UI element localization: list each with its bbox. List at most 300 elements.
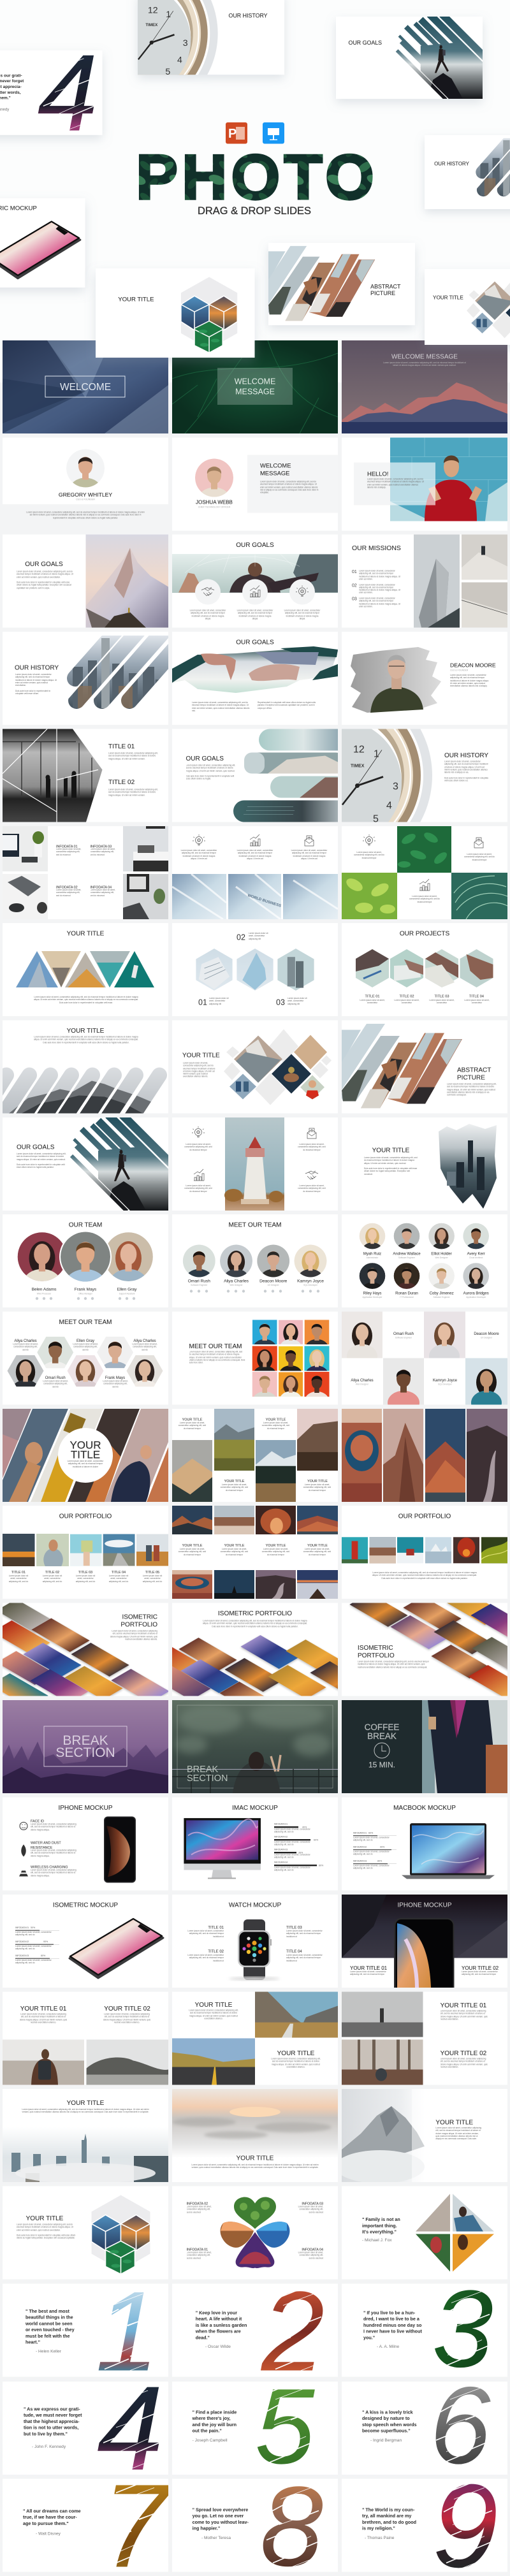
- quote: " A kiss is a lovely trick: [362, 2410, 413, 2415]
- photo: clock arcs: 4: [386, 801, 392, 811]
- slide: abstract picture: [342, 1020, 507, 1113]
- photo: striped leaves: [451, 873, 507, 919]
- heading: MACBOOK MOCKUP: [393, 1805, 456, 1812]
- slide: our history city: [3, 632, 168, 725]
- text block: Lorem ipsum dolor sit amet, consectetur adipiscing elit, sed do eiusmod tempor incididunt ut labore et dolore magna aliqua. Ut enim ad minim veniam, quis nostrud exercitation.: [17, 2223, 73, 2231]
- left features: Lorem ipsum dolor sit amet, consectetur adipiscing elit, sed do eiusmod tempor incididunt ut: [187, 1930, 224, 1938]
- member top names: Lorem ipsum dolor sit amet, consectetur adipiscing elit, sed do: [132, 1343, 157, 1351]
- author: - Helen Keller: [36, 2350, 62, 2354]
- photo: hiker stripes: [66, 1117, 168, 1211]
- hero background: [0, 0, 510, 382]
- captions: TITLE 05: [145, 1571, 159, 1575]
- quote: heart.": [26, 2340, 40, 2345]
- subtitle: DRAG & DROP SLIDES: [198, 205, 311, 217]
- slide: break section woman: [172, 1700, 338, 1793]
- names: Omari Rush: [393, 1332, 414, 1336]
- text block: Lorem ipsum dolor sit amet, consectetur adipiscing elit, sed do eiusmod tempor incididunt ut labore et dolore magna aliqua. Ut enim ad minim veniam, quis nostrud exercitation ullamco laboris nisi ut aliquip ex ea commodo consequat. Duis aute irure dolor in reprehenderit in voluptate.: [191, 2164, 319, 2169]
- quote: hundred minus one day so: [363, 2322, 422, 2328]
- quote: " The best and most: [26, 2308, 69, 2314]
- text 2: Lorem ipsum dolor sit amet, consectetur adipiscing elit, sed do eiusmod tempor: [462, 1970, 498, 1976]
- member bottom names: [42, 1376, 129, 1388]
- text block: Lorem ipsum dolor sit amet, consectetur adipiscing elit, sed do eiusmod tempor incididunt ut labore et dolore magna aliqua. Ut enim ad minim veniam, quis nostrud exercitation ullamco laboris nisi ut aliquip ex ea.: [444, 760, 488, 774]
- text block: Lorem ipsum dolor sit amet, consectetur adipiscing elit, sed do eiusmod tempor incididunt ut labore et dolore magna aliqua. Ut enim ad minim veniam, quis nostrud exercitation ullamco laboris nisi ut aliquip ex ea commodo consequat. Duis aute irure dolor in reprehenderit in voluptate velit esse.: [34, 996, 138, 1004]
- info 04: Lorem ipsum dolor sit amet, consectetur adipiscing elit, sed do eiusmod: [91, 889, 115, 897]
- hexagon 1: [196, 949, 233, 991]
- text block: Duis aute irure dolor in reprehenderit in voluptate velit esse cillum.: [15, 690, 50, 695]
- photo: desk: [3, 826, 48, 871]
- heading: BREAK: [62, 1733, 108, 1748]
- quote: " All our dreams can come: [23, 2508, 81, 2514]
- member 2: Frank Mays: [75, 1288, 97, 1292]
- text block 1: Lorem ipsum dolor sit amet, consectetur adipiscing elit, sed do eiusmod tempor: [354, 851, 384, 859]
- heading: OUR PROJECTS: [400, 931, 449, 937]
- diamond photo: office: [234, 1035, 282, 1082]
- slide: iphone mockup dark: [342, 1895, 507, 1995]
- photo 3: [383, 1358, 424, 1405]
- names row 2: Ronan Duran: [395, 1292, 418, 1295]
- slide: quote 4: [3, 2361, 168, 2495]
- slide: our portfolio five: [3, 1506, 168, 1599]
- slide: infodata clover: [172, 2187, 338, 2280]
- project 3: Lorem ipsum dolor sit amet, consectetur: [429, 999, 455, 1004]
- left features: TITLE 01: [208, 1926, 224, 1930]
- photo 1: [342, 1312, 382, 1358]
- text 1: [350, 1965, 390, 1979]
- text block: Lorem ipsum dolor sit amet, consectetur adipiscing elit, sed do eiusmod tempor incididunt ut labore et dolore magna aliqua. Ut enim ad minim veniam quis nostrud.: [383, 361, 466, 367]
- slide: quote 9: [342, 2461, 507, 2576]
- bars: INFODATA 02: [274, 1836, 288, 1838]
- slide: coffee break: [342, 1700, 507, 1793]
- slide: icons newspaper: [172, 826, 338, 919]
- author: - Oscar Wilde: [205, 2345, 231, 2349]
- heading: HELLO!: [367, 470, 388, 477]
- portrait 2: [59, 1230, 112, 1300]
- name: GREGORY WHITLEY: [59, 491, 112, 498]
- feature 2: RESISTANCE: [31, 1846, 52, 1850]
- text block 2: Lorem ipsum dolor sit amet, consectetur adipiscing elit, sed do eiusmod tempor incididunt ut labore et dolore magna aliqua. Ut enim ad: [237, 849, 273, 860]
- slide: lighthouse: [172, 1117, 338, 1211]
- names: Aliya Charles: [224, 1279, 249, 1284]
- icon: bulb: [192, 1126, 205, 1137]
- quote: beautiful things in the: [26, 2315, 73, 2320]
- names row 1: Andrew Wallace: [393, 1252, 421, 1256]
- photo: flatlay: [3, 874, 48, 919]
- bars: INFODATA 04: [274, 1861, 288, 1864]
- slide: meet our team circles: [172, 1214, 338, 1307]
- portrait on brush: [351, 647, 441, 713]
- right features: Lorem ipsum dolor sit amet, consectetur adipiscing elit, sed do eiusmod tempor incididunt ut: [286, 1930, 323, 1938]
- quote: you.": [363, 2334, 375, 2340]
- info 01: Lorem ipsum dolor sit amet, consectetur adipiscing elit, sed do eiusmod: [186, 2252, 212, 2259]
- text block 2: Lorem ipsum dolor sit amet, consectetur adipiscing elit, sed do eiusmod tempor incididunt ut labore et dolore magna aliqua. Ut enim ad minim veniam.: [108, 788, 158, 796]
- slide: Hello: [342, 437, 507, 530]
- bars: 80%: [41, 1954, 46, 1957]
- member top names: Aliya Charles: [14, 1339, 37, 1343]
- project 1: TITLE 01: [365, 994, 380, 998]
- text block: Lorem ipsum dolor sit amet, consectetur adipiscing elit, sed do eiusmod tempor incididunt ut labore et dolore magna aliqua. Ut enim ad minim veniam, quis nostrud exercitation ullamco laboris nisi ut aliquip ex ea commodo consequat. Duis aute.: [435, 2127, 481, 2140]
- info 01: INFODATA 01: [56, 845, 78, 849]
- heading: YOUR TITLE: [67, 1028, 105, 1035]
- slide: welcome message mountain: [342, 340, 507, 433]
- names: SQL Developer: [438, 1383, 453, 1386]
- info 01: Lorem ipsum dolor sit amet, consectetur adipiscing elit, sed do eiusmod: [56, 848, 81, 856]
- photo: newspaper: [172, 874, 338, 919]
- photos: [342, 1537, 507, 1564]
- number 01: Lorem ipsum dolor sit amet, consectetur adipiscing elit: [209, 997, 228, 1005]
- bars: [15, 1926, 59, 1965]
- feature 2: [21, 1841, 76, 1859]
- quote: is my religion.": [362, 2526, 395, 2531]
- author: - Michael J. Fox: [362, 2238, 392, 2243]
- text block: Lorem ipsum dolor sit amet, consectetur adipiscing elit, sed do eiusmod tempor incididunt ut labore et dolore magna aliqua. Ut enim ad minim veniam, quis nostrud exercitation ullamco laboris nisi ut aliquip ex ea commodo consequat. Duis aute irure dolor in reprehenderit in voluptate velit esse cillum dolore eu fugiat nulla pariatur.: [26, 511, 145, 519]
- info 02: [186, 2202, 212, 2217]
- heading: OUR GOALS: [236, 639, 274, 646]
- text block: Duis aute irure dolor in reprehenderit in voluptate velit esse cillum dolore eu fugiat nulla pariatur. Excepteur sint occaecat cupidatat non proident, sunt in culpa.: [17, 581, 71, 589]
- photo: forest: [342, 2040, 423, 2085]
- project 2: TITLE 02: [399, 994, 414, 998]
- quote: when the flowers are: [195, 2329, 241, 2334]
- hexagon portraits: [7, 1334, 163, 1403]
- number 01: 01: [198, 998, 207, 1007]
- text block 3: Lorem ipsum dolor sit amet, consectetur adipiscing elit, sed do eiusmod tempor: [409, 895, 440, 903]
- names row 1: Software Engineer: [398, 1256, 416, 1259]
- info 03: INFODATA 03: [302, 2202, 323, 2206]
- quote: and the joy will burn: [193, 2422, 237, 2427]
- slide: our goals mountain: [3, 534, 168, 627]
- diamond photo: woman: [300, 1075, 324, 1099]
- info 03: Lorem ipsum dolor sit amet, consectetur adipiscing elit, sed do eiusmod: [91, 848, 115, 856]
- portrait: [66, 449, 105, 487]
- hero card: quote four: [0, 33, 103, 154]
- captions: Lorem ipsum dolor sit amet, consectetur adipiscing elit, sed do: [109, 1575, 128, 1583]
- feature 1: FACE ID: [31, 1819, 44, 1823]
- hero card: abstract picture: [268, 243, 415, 325]
- bars: INFODATA 02: [353, 1846, 367, 1849]
- info 02: INFODATA 02: [56, 886, 78, 890]
- hero card: your title diamonds: [425, 269, 510, 345]
- project 2: Lorem ipsum dolor sit amet, consectetur: [394, 999, 419, 1004]
- right features: Lorem ipsum dolor sit amet, consectetur adipiscing elit, sed do eiusmod tempor incididunt ut: [286, 1954, 323, 1962]
- heading: BREAK: [187, 1765, 218, 1775]
- heading: ISOMETRIC MOCKUP: [53, 1902, 118, 1909]
- names: UX Designer: [481, 1336, 493, 1339]
- slide: watch mockup: [172, 1895, 338, 1988]
- text 2: [271, 2050, 321, 2074]
- slide: four canyon photos: [342, 1409, 507, 1502]
- bars: INFODATA 01: [15, 1926, 29, 1929]
- text block: [17, 571, 73, 589]
- number 02: Lorem ipsum dolor sit amet, consectetur adipiscing elit: [249, 932, 268, 940]
- slide: our missions: [342, 534, 507, 627]
- photo strips: [3, 1409, 168, 1502]
- bars: INFODATA 03: [274, 1849, 288, 1851]
- heading: WELCOME: [235, 377, 275, 386]
- quote: world cannot be seen: [25, 2320, 73, 2326]
- portrait 3: [104, 1232, 153, 1300]
- text 3: YOUR TITLE: [266, 1418, 286, 1422]
- text 1: [177, 1418, 207, 1433]
- bars: 50%: [31, 1926, 36, 1929]
- slide: our history clock: [238, 678, 507, 872]
- heading: YOUR TITLE: [67, 2100, 105, 2107]
- text block 1: Lorem ipsum dolor sit amet, consectetur adipiscing elit, sed do eiusmod tempor incididunt ut labore et dolore magna aliqua. Ut enim ad minim veniam, quis nostrud exercitation ullamco laboris nisi.: [192, 701, 249, 712]
- triangle photos: [16, 951, 154, 987]
- slide: your title collage: [3, 1409, 168, 1502]
- bars: INFODATA 01: [353, 1832, 367, 1835]
- info 03: [298, 2202, 323, 2217]
- heading: OUR HISTORY: [15, 664, 59, 672]
- text 3: [261, 1418, 291, 1433]
- heading: COFFEE: [365, 1722, 399, 1732]
- heading: YOUR TITLE: [372, 1147, 410, 1154]
- text block: Lorem ipsum dolor sit amet, consectetur adipiscing elit, sed do eiusmod tempor incididunt ut labore et dolore magna aliqua. Ut enim ad minim veniam, quis nostrud exercitation ullamco laboris nisi ut aliquip ex ea commodo consequat. Duis aute irure dolor in reprehenderit in voluptate velit esse cillum dolore eu fugiat nulla pariatur.: [34, 1035, 138, 1044]
- captions: Lorem ipsum dolor sit amet, consectetur adipiscing elit, sed do eiusmod tempor: [178, 1548, 206, 1556]
- photo: clock arcs: TIMEX: [351, 764, 365, 769]
- text 1: Lorem ipsum dolor sit amet, consectetur adipiscing elit, sed do eiusmod tempor: [178, 1422, 206, 1430]
- gray diamonds: [224, 1029, 332, 1105]
- text block 2: Lorem ipsum dolor sit amet, consectetur adipiscing elit, sed do eiusmod tempor: [184, 1184, 212, 1193]
- heading: BREAK: [367, 1731, 397, 1741]
- social icons: [190, 1290, 319, 1293]
- slide: your title two photos: [3, 1991, 168, 2085]
- name: DEACON MOORE: [450, 662, 496, 668]
- text block: Duis aute irure dolor in reprehenderit in voluptate velit esse cillum dolore eu fugiat.: [186, 775, 234, 780]
- heading: WELCOME: [260, 462, 291, 469]
- quote: " Find a place inside: [193, 2410, 237, 2415]
- slide: title 01 02: [3, 729, 168, 822]
- text block: Lorem ipsum dolor sit amet, consectetur adipiscing elit, sed do eiusmod tempor incididunt ut labore et dolore magna aliqua. Ut enim ad minim veniam, quis nostrud exercitation ullamco laboris nisi ut aliquip ex ea commodo consequat. Duis aute irure dolor in reprehenderit in voluptate velit esse cillum dolore eu fugiat nulla pariatur.: [203, 1619, 307, 1627]
- slide: triangles: [3, 923, 168, 1016]
- icon: PowerPoint: P: [228, 127, 237, 141]
- captions: Lorem ipsum dolor sit amet, consectetur adipiscing elit, sed do: [76, 1575, 95, 1583]
- bars: [353, 1832, 397, 1870]
- slide: your title road: [172, 1991, 338, 2085]
- author: - Thomas Paine: [365, 2536, 395, 2540]
- text block 1: Lorem ipsum dolor sit amet, consectetur adipiscing elit, sed do eiusmod tempor incididunt ut labore et dolore magna aliqua: [190, 609, 226, 620]
- member 1: Belen Adams: [32, 1288, 57, 1292]
- heading: ISOMETRIC: [358, 1645, 393, 1652]
- slide: quote 2: [172, 2268, 338, 2394]
- captions: YOUR TITLE: [266, 1544, 286, 1548]
- bars: INFODATA 03: [353, 1860, 367, 1863]
- slide: iphone mockup: [3, 1798, 168, 1891]
- names: Omari Rush: [188, 1279, 210, 1284]
- info 04: [298, 2248, 323, 2263]
- quote: that the highest apprecia-: [24, 2419, 80, 2424]
- info 03: Lorem ipsum dolor sit amet, consectetur adipiscing elit, sed do eiusmod: [298, 2206, 323, 2213]
- dark band: [342, 1895, 507, 1958]
- member top names: Lorem ipsum dolor sit amet, consectetur adipiscing elit, sed do: [13, 1343, 38, 1351]
- quote: must be felt with the: [26, 2333, 69, 2339]
- member top names: [12, 1339, 158, 1351]
- text 1: [189, 2002, 238, 2026]
- photo: workspace: [123, 874, 168, 919]
- slide: quote 1: [3, 2268, 168, 2394]
- quote: or even touched - they: [26, 2327, 75, 2332]
- slide: your title clouds: [172, 2089, 338, 2182]
- photo: stairs: [462, 534, 507, 580]
- isometric phone: [69, 1919, 163, 1978]
- photo: mountain: [85, 534, 168, 627]
- member 2: [75, 1288, 97, 1295]
- text 2: YOUR TITLE: [277, 2050, 315, 2057]
- text 2: YOUR TITLE 02: [441, 2050, 487, 2057]
- author: - Ingrid Bergman: [370, 2438, 402, 2443]
- names row 2: [362, 1292, 489, 1299]
- bars: Lorem ipsum dolor sit amet, consectetur adipiscing elit, sed do: [353, 1836, 390, 1842]
- portrait 4: [295, 1244, 326, 1290]
- icon: Keynote: [263, 122, 284, 144]
- diamond photo: people: [229, 1073, 256, 1099]
- photo: window silhouette: [3, 729, 102, 822]
- feature 2: WATER AND DUST: [31, 1841, 61, 1845]
- hexagon 2: [237, 949, 273, 991]
- info 02: Lorem ipsum dolor sit amet, consectetur adipiscing elit, sed do eiusmod: [186, 2206, 212, 2213]
- text 2: Lorem ipsum dolor sit amet, consectetur adipiscing elit, sed do eiusmod tempor incididunt ut labore et dolore magna aliqua. Ut enim ad minim veniam, quis nostrud exercitation ullamco.: [103, 2013, 150, 2023]
- photo: road: [172, 2039, 255, 2085]
- names row 2: Riley Hays: [363, 1292, 381, 1295]
- info 02: [56, 886, 83, 900]
- slide: our goals brush: [172, 632, 339, 725]
- heading: PORTFOLIO: [120, 1621, 157, 1628]
- bars: 90%: [43, 1940, 48, 1943]
- bars: [274, 1823, 324, 1872]
- quote: heart. A life without it: [196, 2316, 242, 2322]
- text block 2: Lorem ipsum dolor sit amet, consectetur adipiscing elit, sed do eiusmod tempor: [464, 853, 495, 861]
- text 4: YOUR TITLE: [307, 1480, 328, 1483]
- text 1: Lorem ipsum dolor sit amet, consectetur adipiscing elit, sed do eiusmod tempor incididunt ut labore et dolore magna aliqua. Ut enim ad minim veniam, quis nostrud exercitation ullamco.: [20, 2013, 67, 2023]
- hero card: our goals hiker: [336, 17, 483, 99]
- photo: clock arcs: 5: [373, 813, 379, 825]
- text block 1: Lorem ipsum dolor sit amet, consectetur adipiscing elit, sed do eiusmod tempor incididunt ut labore et dolore magna aliqua. Ut enim ad: [181, 849, 217, 860]
- text block: Duis aute irure dolor in reprehenderit in voluptate velit esse cillum dolore eu fugiat nulla pariatur. Excepteur sint occaecat cupidatat.: [17, 2234, 75, 2239]
- info 01: [186, 2248, 212, 2263]
- slide: isometric portfolio 1: [0, 1599, 170, 1707]
- quote: become superfluous.": [362, 2428, 411, 2434]
- heading: MESSAGE: [235, 388, 275, 397]
- photo 1: [342, 1409, 382, 1502]
- names row 2: Application Developer: [466, 1296, 486, 1299]
- text block: Duis aute irure dolor in reprehenderit in voluptate velit esse cillum dolore eu fugiat nulla pariatur.: [17, 1163, 65, 1168]
- right features: TITLE 04: [286, 1950, 302, 1954]
- heading: PORTFOLIO: [358, 1652, 395, 1659]
- heading: YOUR TITLE: [237, 2155, 274, 2162]
- diamond photo: hands: [272, 1054, 311, 1094]
- text 4: [302, 1480, 332, 1495]
- isometric tiles: [0, 1599, 170, 1707]
- quote: " Keep love in your: [196, 2310, 237, 2315]
- heading: WELCOME: [60, 382, 111, 393]
- info 02: Lorem ipsum dolor sit amet, consectetur adipiscing elit, sed do eiusmod: [56, 889, 81, 897]
- slide: quote 3: [342, 2268, 507, 2390]
- bars: INFODATA 01: [274, 1823, 288, 1826]
- text 2: [462, 1965, 501, 1979]
- slide: your title city fog: [3, 2089, 168, 2183]
- names: Software Engineer: [395, 1336, 412, 1339]
- portrait 1: [183, 1244, 215, 1290]
- photo 4: [465, 1358, 507, 1405]
- portrait 2: [220, 1244, 252, 1290]
- number 6: 6: [430, 2364, 491, 2487]
- text block: Lorem ipsum dolor sit amet, consectetur adipiscing elit, sed do eiusmod tempor incididunt ut labore et dolore magna aliqua. Ut enim ad minim veniam, quis nostrud.: [17, 1153, 66, 1161]
- right features: [286, 1926, 323, 1964]
- bars: Lorem ipsum dolor sit amet, consectetur adipiscing elit, sed do: [15, 1931, 52, 1936]
- text block: Lorem ipsum dolor sit amet, consectetur adipiscing elit, sed do eiusmod tempor incididunt ut labore et dolore magna aliqua. Ut enim ad minim veniam, quis nostrud exercitation ullamco laboris nisi ut aliquip ex ea commodo consequat. Duis aute irure dolor.: [189, 1350, 245, 1364]
- names: Deacon Moore: [474, 1332, 499, 1336]
- quote: ing happier.": [193, 2526, 220, 2531]
- text 4: Lorem ipsum dolor sit amet, consectetur adipiscing elit, sed do eiusmod tempor: [303, 1483, 331, 1492]
- author: - Mother Teresa: [201, 2536, 231, 2540]
- text block: Lorem ipsum dolor sit amet, consectetur adipiscing elit, sed do eiusmod tempor incididunt ut labore et dolore magna aliqua. Ut enim ad minim veniam, quis nostrud exercitation ullamco laboris.: [183, 1062, 215, 1078]
- heading 2: TITLE 02: [108, 779, 135, 786]
- quote: " If you live to be a hun-: [363, 2310, 415, 2315]
- photo: newspaper: WORLD BUSINESS: [247, 894, 282, 908]
- slide: welcome message green: [172, 340, 338, 433]
- heading: YOUR TITLE: [67, 931, 105, 937]
- text block: Lorem ipsum dolor sit amet, consectetur adipiscing elit, sed do eiusmod tempor incididunt ut labore et dolore magna aliqua. Ut enim ad minim veniam, quis nostrud exercitation.: [17, 570, 73, 578]
- photo: city fog: [3, 2127, 168, 2183]
- captions: YOUR TITLE: [307, 1544, 328, 1548]
- quote: age to pursue them.": [23, 2521, 69, 2526]
- captions: TITLE 02: [45, 1571, 59, 1575]
- photo: valley: [255, 1991, 338, 2037]
- member top names: Aliya Charles: [133, 1339, 156, 1343]
- number 4: 4: [97, 2361, 164, 2495]
- bars: Lorem ipsum dolor sit amet, consectetur adipiscing elit, sed do: [15, 1959, 52, 1964]
- bars: Lorem ipsum dolor sit amet, consectetur adipiscing elit, sed do: [353, 1850, 390, 1856]
- names row 2: Coby Jimenez: [430, 1292, 454, 1295]
- photo: clock arcs: 3: [393, 782, 398, 792]
- heading: OUR GOALS: [236, 542, 274, 549]
- text 1: YOUR TITLE: [195, 2002, 233, 2009]
- photo 2: [383, 1409, 423, 1502]
- text block 2: Reprehenderit in voluptate velit esse cillum dolore eu fugiat nulla pariatur. Excepteur sint occaecat cupidatat non proident, sunt in culpa qui officia.: [258, 701, 316, 709]
- social icons: [36, 1297, 135, 1300]
- role: CEO & FOUNDER: [76, 498, 95, 501]
- heading: MEET OUR TEAM: [189, 1343, 242, 1350]
- text block: Lorem ipsum dolor sit amet, consectetur adipiscing elit, sed do eiusmod tempor incididunt ut labore et dolore magna aliqua. Ut enim ad minim veniam, quis nostrud exercitation.: [15, 673, 57, 687]
- text block: [364, 1156, 418, 1188]
- bars: Lorem ipsum dolor sit amet, consectetur adipiscing elit, sed do: [15, 1945, 52, 1950]
- feature 3: Lorem ipsum dolor sit amet, consectetur adipiscing elit, sed do eiusmod tempor incididunt ut labore et dolore magna aliqua.: [31, 1869, 76, 1877]
- list: 02: [352, 584, 357, 588]
- frame: [44, 1726, 127, 1766]
- slide: quote 7: [3, 2461, 172, 2576]
- feature 2: Lorem ipsum dolor sit amet, consectetur adipiscing elit, sed do eiusmod tempor incididunt ut labore et dolore magna aliqua.: [31, 1849, 76, 1857]
- icon: bulb: [363, 834, 375, 845]
- slide: our goals hiker: [3, 1117, 168, 1211]
- text block: Lorem ipsum dolor sit amet, consectetur adipiscing elit, sed do eiusmod tempor incididunt ut labore et dolore: [68, 1460, 103, 1468]
- text 1: [19, 2005, 68, 2030]
- names row 1: Elliot Holder: [431, 1252, 452, 1256]
- text 1: Lorem ipsum dolor sit amet, consectetur adipiscing elit, sed do eiusmod tempor incididunt ut labore et dolore magna aliqua. Ut enim ad minim veniam, quis nostrud exercitation.: [441, 2009, 488, 2020]
- info 04: Lorem ipsum dolor sit amet, consectetur adipiscing elit, sed do eiusmod: [298, 2252, 323, 2259]
- photo 1: [172, 1440, 212, 1502]
- photo: diagonal city: [60, 632, 168, 711]
- photo 2: [424, 1312, 465, 1358]
- heading: OUR HISTORY: [444, 752, 488, 759]
- hexagon 3: [277, 949, 314, 991]
- photo: clock arcs: 12: [353, 745, 365, 755]
- icon: PowerPoint: [226, 122, 247, 144]
- heading: OUR GOALS: [17, 1144, 55, 1151]
- heading: YOUR TITLE: [182, 1052, 220, 1059]
- slide: our projects: [342, 923, 507, 1016]
- photos: [3, 1534, 168, 1571]
- photo: hill: [87, 2040, 168, 2085]
- heading: WATCH MOCKUP: [229, 1902, 281, 1909]
- names: [188, 1279, 324, 1286]
